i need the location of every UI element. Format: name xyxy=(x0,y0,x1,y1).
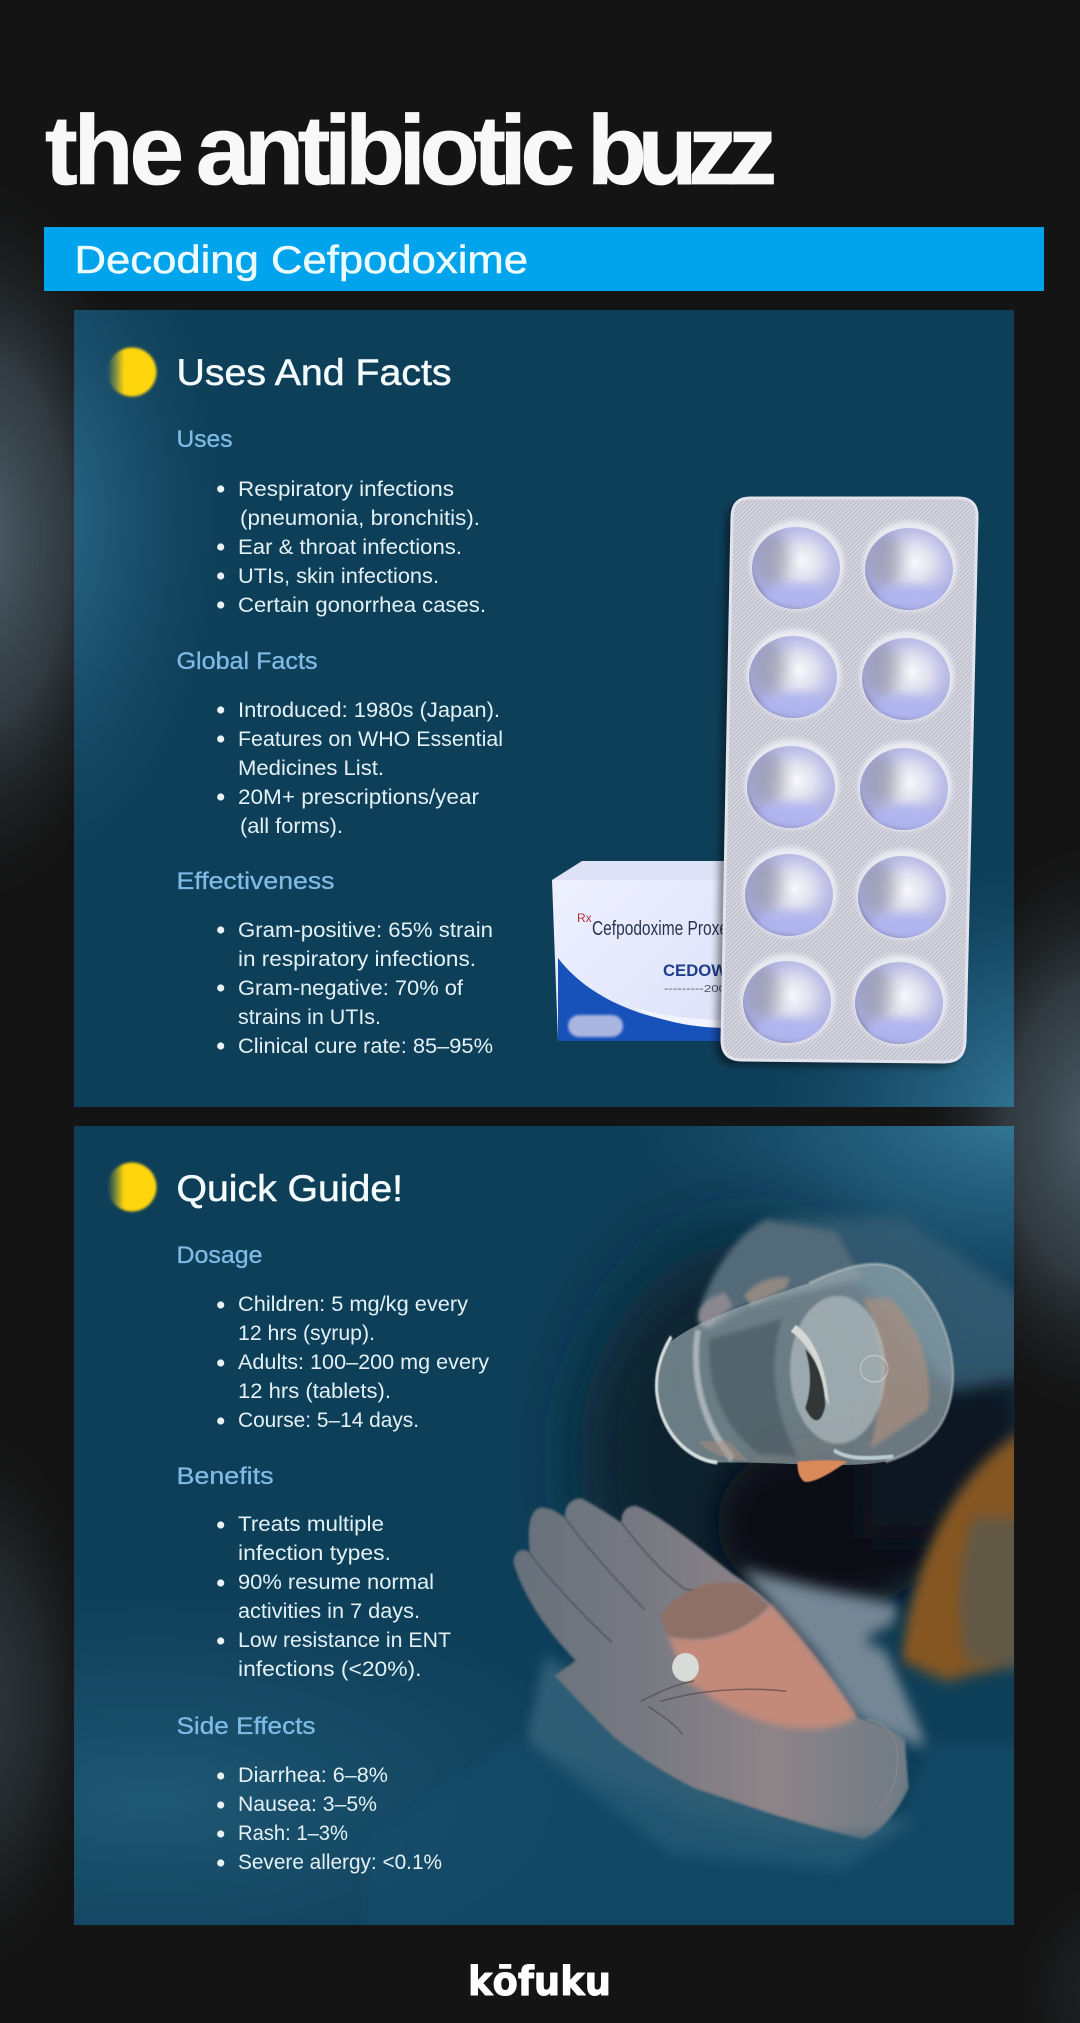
yellow dot marker xyxy=(108,1162,156,1212)
section: effectiveness: Clinical cure rate: 85–95% xyxy=(238,1034,493,1058)
yellow dot marker xyxy=(108,348,156,396)
section: global facts xyxy=(176,648,503,838)
section: effectiveness: Gram-positive: 65% strain xyxy=(238,918,493,942)
water glass xyxy=(656,1264,953,1465)
tablet on palm xyxy=(672,1653,699,1682)
section: benefits: infections (<20%). xyxy=(238,1657,422,1681)
section: dosage xyxy=(176,1242,489,1432)
section: benefits xyxy=(176,1463,451,1681)
section: effectiveness: Gram-negative: 70% of xyxy=(238,976,463,1000)
watch band xyxy=(867,1719,898,1809)
lit palm xyxy=(668,1604,857,1729)
subtitle banner xyxy=(44,227,1044,291)
panel: quick guide xyxy=(74,1126,1014,1925)
section: effectiveness: Effectiveness xyxy=(176,868,334,895)
photo: hands with water glass and tablet xyxy=(473,1196,1014,1925)
section: benefits: Benefits xyxy=(176,1463,274,1490)
medicine box: Rx xyxy=(577,911,592,925)
blister pack xyxy=(716,498,977,1067)
section: side effects: Severe allergy: <0.1% xyxy=(238,1850,442,1874)
dark backdrop xyxy=(580,1242,932,1671)
section: dosage: 12 hrs (syrup). xyxy=(238,1321,375,1345)
section: benefits: Low resistance in ENT xyxy=(238,1628,451,1652)
medicine box: Cefpodoxime Proxe xyxy=(592,918,728,940)
medicine box: ---------200 xyxy=(664,984,727,995)
section: uses xyxy=(176,426,486,617)
section: effectiveness: in respiratory infections. xyxy=(238,947,476,971)
lower hand xyxy=(514,1498,909,1839)
title: antibiotic xyxy=(196,95,575,205)
title: the xyxy=(45,95,184,205)
section: effectiveness xyxy=(176,868,493,1058)
panel: uses and facts xyxy=(0,120,1080,1390)
section: benefits: activities in 7 days. xyxy=(238,1599,420,1623)
medicine box xyxy=(552,861,730,1041)
upper hand xyxy=(698,1219,863,1328)
section: effectiveness: strains in UTIs. xyxy=(238,1005,381,1029)
section: side effects: Rash: 1–3% xyxy=(238,1821,348,1845)
title xyxy=(45,95,777,205)
section: global facts: Features on WHO Essential xyxy=(238,727,503,751)
section: side effects: Nausea: 3–5% xyxy=(238,1792,377,1816)
palm creases xyxy=(641,1681,786,1735)
section: dosage: 12 hrs (tablets). xyxy=(238,1379,391,1403)
section: uses: (pneumonia, bronchitis). xyxy=(240,506,480,530)
tablet blisters xyxy=(741,520,957,1045)
section: benefits: infection types. xyxy=(238,1541,391,1565)
orange fingertip xyxy=(798,1460,847,1482)
section: global facts: 20M+ prescriptions/year xyxy=(238,785,479,809)
panel background xyxy=(0,860,1080,2023)
section: side effects: Diarrhea: 6–8% xyxy=(238,1763,388,1787)
section: benefits: 90% resume normal xyxy=(238,1570,434,1594)
lower sleeve haze xyxy=(526,1656,920,1870)
panel background xyxy=(0,120,1080,1390)
section: global facts: Global Facts xyxy=(176,648,318,675)
section: side effects: Side Effects xyxy=(176,1713,316,1740)
section: uses: Uses xyxy=(176,426,232,453)
title: buzz xyxy=(587,95,777,205)
section: dosage: Children: 5 mg/kg every xyxy=(238,1292,468,1316)
section: uses: Respiratory infections xyxy=(238,477,454,501)
forearm fade xyxy=(473,1749,1014,1925)
section: benefits: Treats multiple xyxy=(238,1512,384,1536)
section: uses: Ear & throat infections. xyxy=(238,535,462,559)
orange sleeve xyxy=(901,1431,1023,1681)
logo: kofuku: kōfuku xyxy=(468,1959,611,2005)
finger creases xyxy=(530,1518,713,1643)
section: dosage: Course: 5–14 days. xyxy=(238,1408,419,1432)
section: global facts: Medicines List. xyxy=(238,756,384,780)
section: global facts: (all forms). xyxy=(240,814,343,838)
section: dosage: Dosage xyxy=(176,1242,262,1269)
heading: uses and facts: Uses And Facts xyxy=(176,352,452,393)
section: uses: Certain gonorrhea cases. xyxy=(238,593,486,617)
section: side effects xyxy=(176,1713,442,1874)
medicine box: CEDOW xyxy=(663,961,728,980)
section: global facts: Introduced: 1980s (Japan). xyxy=(238,698,500,722)
upper arm xyxy=(771,1217,1023,1390)
subtitle banner: Decoding Cefpodoxime xyxy=(74,239,528,282)
heading: quick guide: Quick Guide! xyxy=(176,1168,403,1209)
section: uses: UTIs, skin infections. xyxy=(238,564,439,588)
section: dosage: Adults: 100–200 mg every xyxy=(238,1350,489,1374)
grey sleeve xyxy=(740,1569,928,1747)
